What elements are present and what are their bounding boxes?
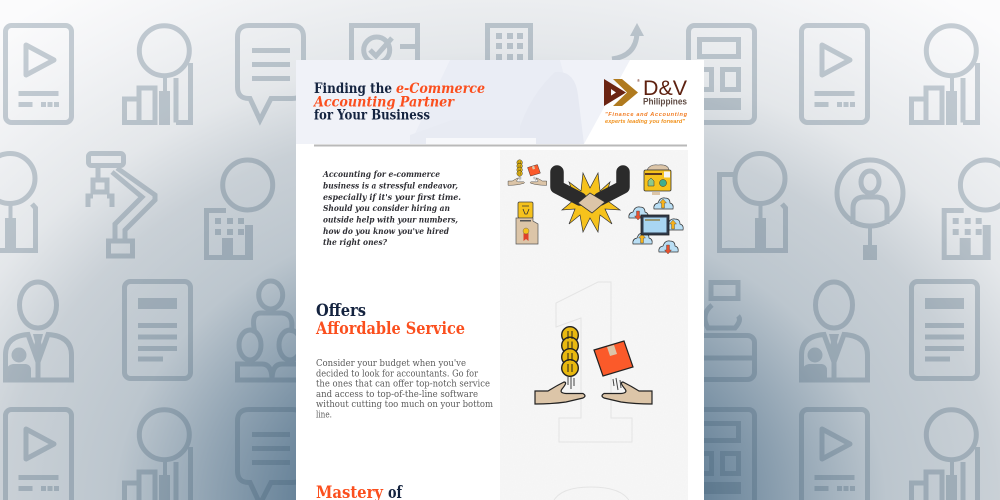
icon: clasped hands — [578, 193, 605, 213]
icon: growth arrow — [612, 23, 644, 59]
section 1 heading: Offers — [316, 301, 366, 321]
title: Finding the — [314, 81, 392, 97]
icon: magnifier document right — [720, 154, 786, 253]
section 1 heading — [315, 301, 465, 339]
ghost numeral 2 — [553, 487, 630, 500]
panel: header background — [296, 60, 630, 144]
icon: magnifier document left — [0, 154, 36, 253]
section 1 body text: decided to look for accountants. Go for — [316, 368, 478, 379]
icon: magnifier chart row 4 right — [912, 410, 978, 500]
icon: video document row 4 left — [6, 410, 72, 500]
icon: coins and parcel exchange small — [508, 160, 547, 185]
logo: D&V Philippines: D&V — [643, 77, 687, 100]
icon: magnifier chart row 4 — [124, 410, 190, 500]
title: for Your Business — [314, 108, 430, 124]
icon: logo arrows — [604, 79, 638, 106]
icon: hand at desk — [690, 282, 754, 380]
icon: black arms — [557, 172, 623, 199]
illustration: handshake collage — [508, 160, 683, 254]
section 1 body text: line. — [316, 410, 332, 420]
title — [312, 81, 485, 124]
icon: check card — [352, 26, 418, 63]
icon: people group — [238, 281, 306, 380]
icon: video document row 4 right — [802, 410, 868, 500]
icon: businessperson left — [6, 282, 72, 382]
icon: certificate — [516, 202, 538, 244]
icon: magnifier chart row 1 — [124, 26, 190, 125]
intro text: Accounting for e-commerce — [322, 170, 440, 180]
logo: D&V Philippines: "Finance and Accounting — [605, 112, 688, 118]
logo: D&V Philippines: Philippines — [643, 96, 687, 106]
intro text: especially if it's your first time. — [323, 193, 461, 203]
section 1 body text: Consider your budget when you've — [316, 358, 466, 369]
icon: monitor with clouds — [629, 198, 683, 254]
section 1 heading: Affordable Service — [315, 319, 465, 339]
intro text: Should you consider hiring an — [323, 204, 450, 214]
title: e-Commerce — [396, 81, 485, 97]
icon: calculator row 1 — [688, 26, 754, 122]
icon: text document right — [912, 282, 978, 378]
icon: businessperson right — [802, 282, 868, 382]
icon: robot arm — [88, 154, 155, 256]
icon: text document left — [124, 282, 190, 378]
title: Accounting Partner — [312, 94, 455, 110]
logo: D&V Philippines — [604, 77, 688, 125]
icon: starburst — [562, 173, 620, 232]
icon: speech bubble row 4 — [238, 410, 304, 500]
intro text — [322, 170, 461, 248]
icon: calculator row 4 — [688, 410, 754, 500]
illustration: coins and parcel exchange — [535, 327, 652, 404]
section 1 body text: the ones that can offer top-notch service — [316, 379, 490, 390]
icon: video document row 1 right — [802, 26, 868, 122]
section 1 body text: and access to top-of-the-line software — [316, 389, 478, 400]
intro text: outside help with your numbers, — [323, 216, 458, 226]
ghost numeral 1 — [556, 282, 632, 442]
icon: magnifier building left — [206, 160, 273, 260]
icon: building — [488, 26, 530, 76]
panel: grey illustration column — [500, 150, 688, 500]
logo: D&V Philippines: ® — [637, 78, 640, 83]
icon: video document row 1 left — [6, 26, 72, 122]
section 1 body text: without cutting too much on your bottom — [316, 399, 493, 410]
intro text: how do you know you've hired — [323, 227, 449, 237]
panel: white infographic page — [296, 60, 704, 500]
icon: magnifier chart row 1 right — [912, 26, 978, 125]
section 1 body text — [316, 358, 493, 420]
icon: magnifier building right — [944, 160, 1000, 260]
icon: person in magnifier — [837, 160, 903, 260]
icon: speech bubble row 1 — [238, 26, 304, 120]
icon: card with badges — [644, 165, 671, 195]
logo: D&V Philippines: experts leading you forward" — [605, 119, 685, 125]
divider rule — [314, 144, 687, 146]
intro text: the right ones? — [323, 238, 388, 248]
intro text: business is a stressful endeavor, — [323, 182, 458, 192]
